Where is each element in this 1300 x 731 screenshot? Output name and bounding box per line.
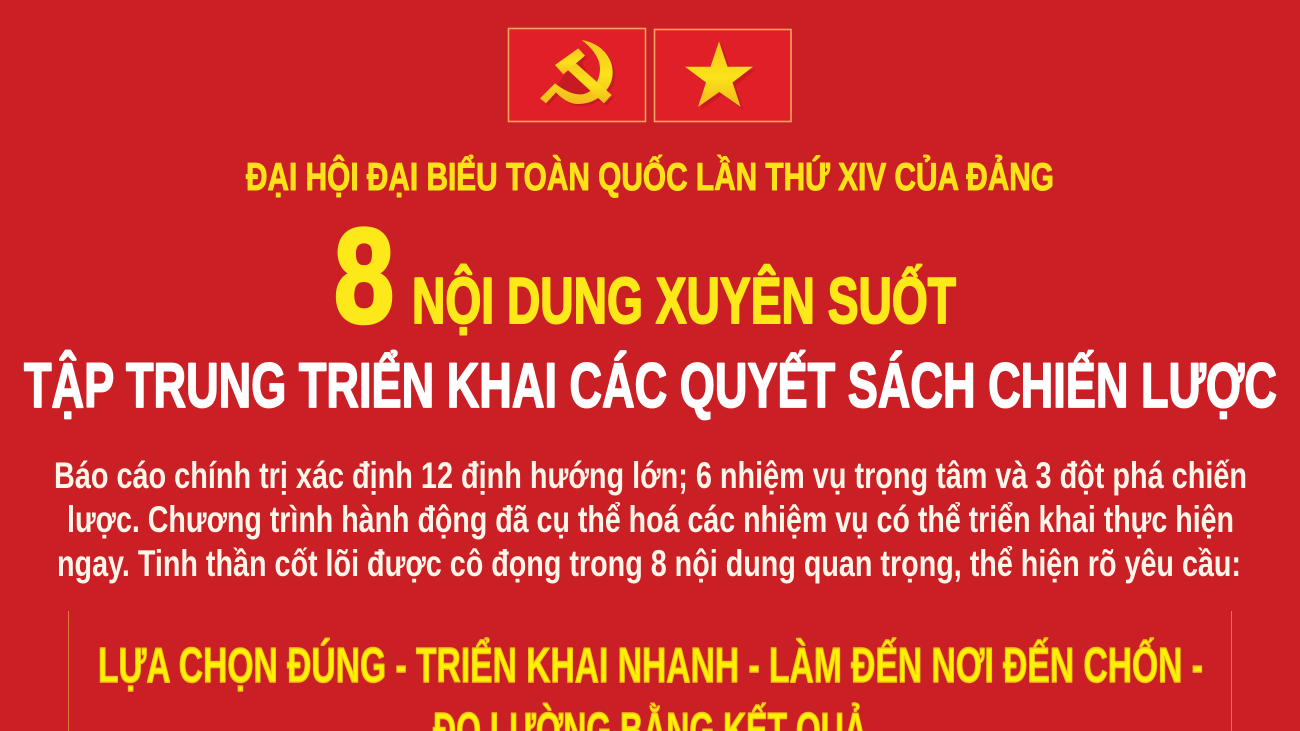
panel: core requirement [68,611,1232,731]
text block: introduction paragraph [54,455,1247,584]
icon: hammer and sickle [540,40,615,106]
title: line one [334,202,956,351]
icon: yellow star [685,42,753,107]
title text yellow: NỘI DUNG XUYÊN SUỐT [412,264,956,337]
icon: national flag with star [654,30,791,122]
title number 8: 8 [334,202,394,351]
icon: party flag [508,28,646,122]
callout: requirement text [98,638,1203,731]
heading: congress name: ĐẠI HỘI ĐẠI BIỂU TOÀN QUỐC LẦN THỨ XIV CỦA ĐẢNG [246,154,1054,199]
